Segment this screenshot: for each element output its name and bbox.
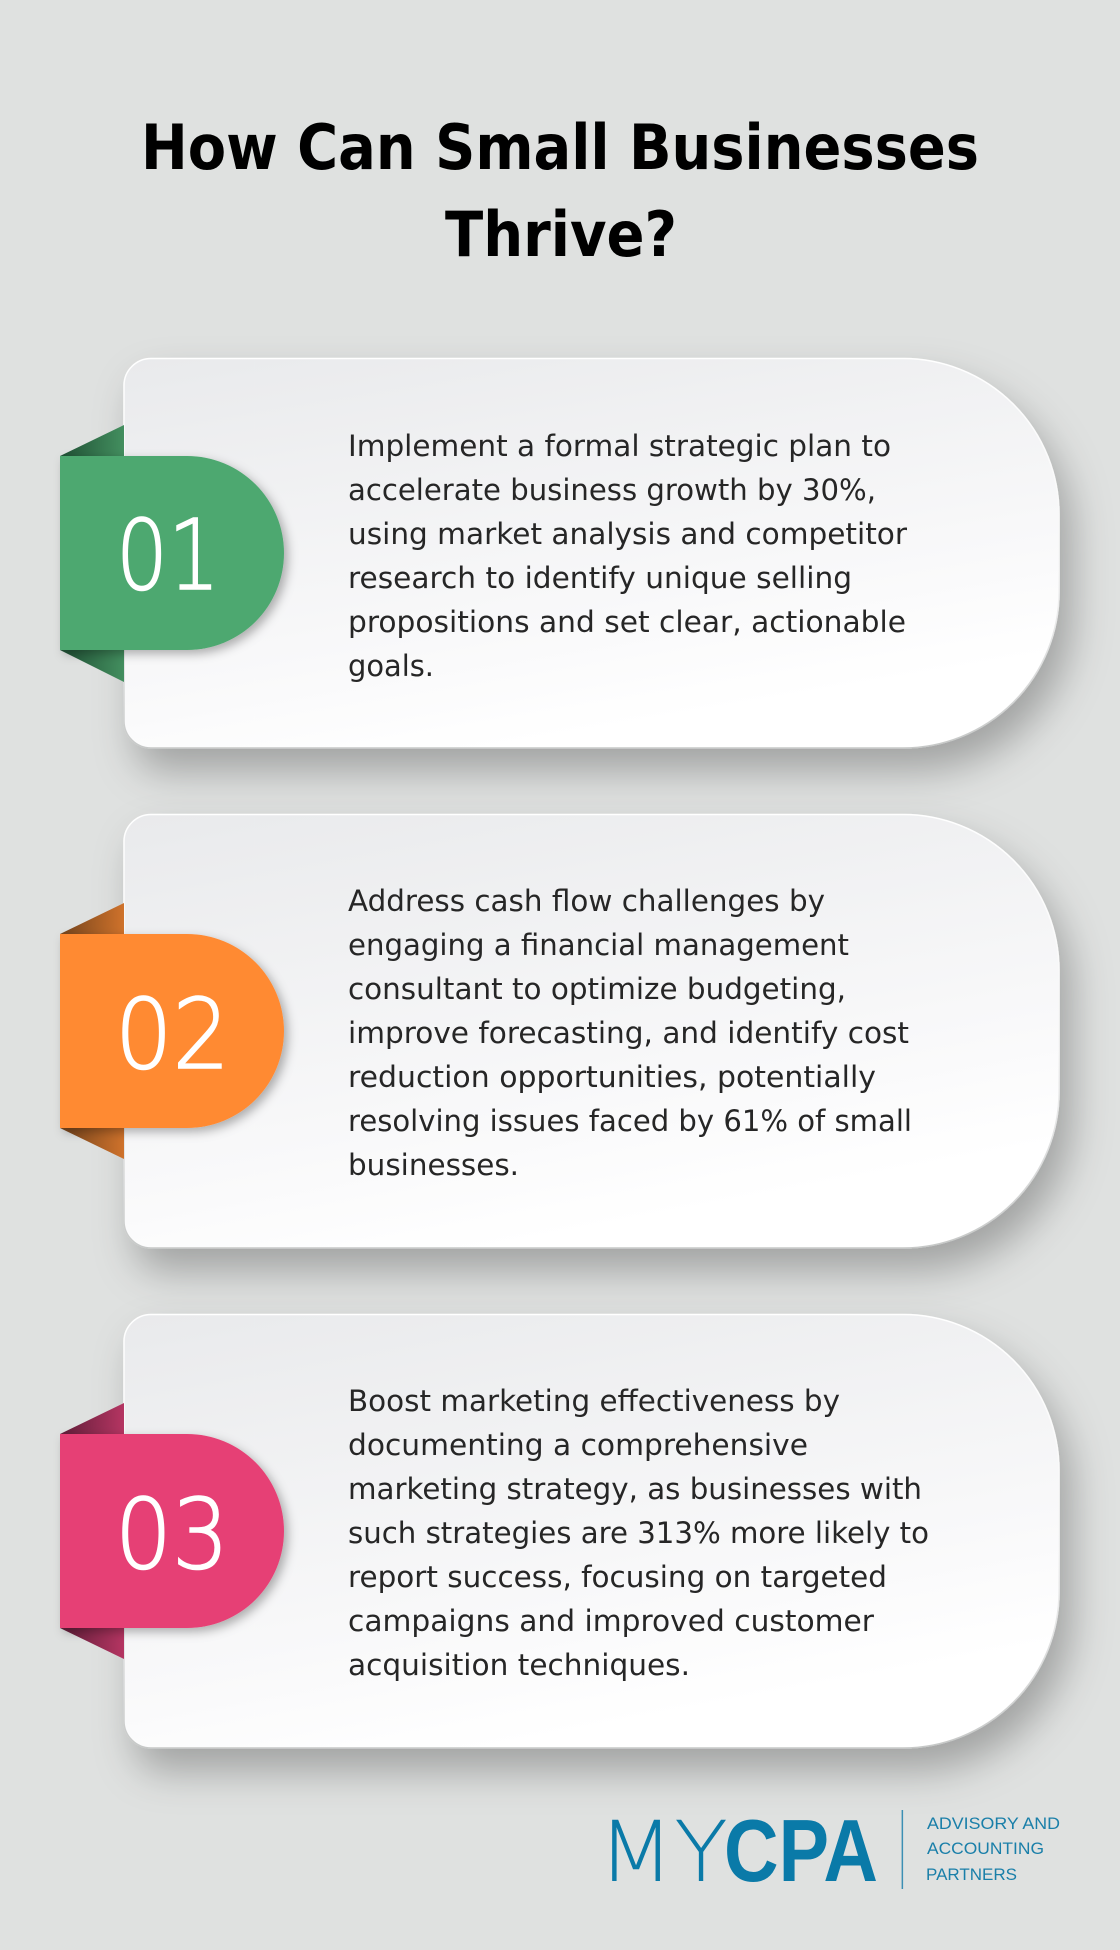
text: step 03: campaigns and improved customer <box>348 1604 875 1638</box>
card 01 background <box>124 358 1059 748</box>
title: Thrive? <box>445 198 677 271</box>
text: step 03: such strategies are 313% more likely to <box>348 1516 929 1550</box>
title <box>141 111 979 271</box>
panel: step 02 <box>60 814 1059 1248</box>
number tab 02 <box>60 934 284 1128</box>
tagline: ACCOUNTING <box>927 1839 1044 1858</box>
panel: step 03 <box>60 1314 1059 1748</box>
tagline: ADVISORY AND <box>927 1814 1060 1833</box>
card 02 background <box>124 814 1059 1248</box>
text: step 02 <box>348 884 912 1182</box>
text: step 01: accelerate business growth by 30%, <box>348 473 876 507</box>
text: step 03: documenting a comprehensive <box>348 1428 808 1462</box>
text: step 02: Address cash flow challenges by <box>348 884 825 918</box>
text: step 02: businesses. <box>348 1148 519 1182</box>
ribbon folds 02 <box>60 903 124 1159</box>
text: step 02: engaging a financial management <box>348 928 849 962</box>
tagline <box>926 1814 1060 1884</box>
number 03: 03 <box>115 1478 229 1591</box>
text: step 02: improve forecasting, and identify cost <box>348 1016 909 1050</box>
text: step 01: research to identify unique selling <box>348 561 852 595</box>
logo: MyCPA <box>598 1801 1060 1901</box>
text: step 03: report success, focusing on targeted <box>348 1560 887 1594</box>
text: step 02: reduction opportunities, potentially <box>348 1060 876 1094</box>
panel: step 01 <box>60 358 1059 748</box>
text: step 01: propositions and set clear, actionable <box>348 605 906 639</box>
text: step 01: Implement a formal strategic plan to <box>348 429 891 463</box>
title: How Can Small Businesses <box>141 111 979 184</box>
text: step 03: Boost marketing effectiveness by <box>348 1384 840 1418</box>
ribbon folds 01 <box>60 425 124 682</box>
card 03 background <box>124 1314 1059 1748</box>
ribbon folds 03 <box>60 1403 124 1659</box>
text: step 02: consultant to optimize budgeting, <box>348 972 846 1006</box>
text: step 02: resolving issues faced by 61% of small <box>348 1104 912 1138</box>
text: step 01 <box>348 429 908 683</box>
text: step 03: acquisition techniques. <box>348 1648 690 1682</box>
text: step 01: using market analysis and competitor <box>348 517 908 551</box>
wordmark: MY <box>598 1803 728 1901</box>
tagline: PARTNERS <box>926 1865 1017 1884</box>
number tab 03 <box>60 1434 284 1628</box>
text: step 01: goals. <box>348 649 434 683</box>
wordmark: CPA <box>724 1801 878 1900</box>
number 01: 01 <box>116 499 220 612</box>
wordmark <box>598 1801 878 1901</box>
text: step 03 <box>348 1384 929 1682</box>
number tab 01 <box>60 456 284 650</box>
text: step 03: marketing strategy, as businesses with <box>348 1472 922 1506</box>
number 02: 02 <box>115 978 230 1091</box>
